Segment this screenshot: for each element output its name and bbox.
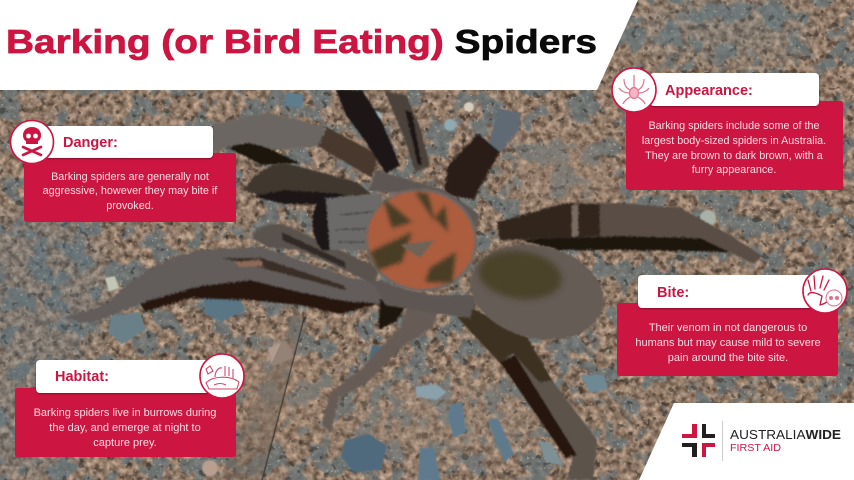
text: bite: [635, 322, 821, 364]
heading: danger: Danger:: [63, 135, 118, 151]
panel: appearance: [612, 68, 843, 190]
title banner: [0, 0, 638, 90]
logo panel: [639, 403, 854, 480]
icon: hand with bite: [803, 269, 847, 313]
carapace: [358, 181, 484, 299]
pedipalp: [312, 193, 382, 250]
leg: upper left: [213, 112, 378, 178]
logo wordmark: [730, 428, 841, 454]
text: appearance: Barking spiders include some of the: [648, 120, 820, 132]
text: habitat: [34, 407, 216, 449]
text: danger: Barking spiders are generally not: [51, 171, 209, 183]
panel: bite: [617, 269, 847, 376]
text: danger: provoked.: [106, 200, 154, 212]
legs: top: [336, 90, 521, 199]
text: appearance: They are brown to dark brown, with a: [645, 150, 823, 162]
leg: right: [497, 203, 762, 264]
text: appearance: largest body-sized spiders in Australia.: [642, 135, 826, 147]
icon: first aid cross logo: [682, 424, 715, 457]
panel: danger: [10, 120, 236, 222]
text: danger: [43, 171, 218, 212]
icon: spider: [612, 68, 656, 112]
text: danger: aggressive, however they may bite if: [43, 185, 218, 197]
title: Barking (or Bird Eating) Spiders: [6, 24, 597, 61]
panel: habitat: [15, 354, 244, 457]
text: bite: pain around the bite site.: [668, 352, 788, 364]
leg: second left: [252, 224, 378, 285]
text: appearance: [642, 120, 826, 176]
text: habitat: the day, and emerge at night to: [49, 422, 201, 434]
heading: appearance: Appearance:: [665, 83, 753, 99]
leg: far left lower: [67, 247, 398, 323]
text: bite: humans but may cause mild to severe: [635, 337, 821, 349]
text: bite: Their venom in not dangerous to: [649, 322, 807, 334]
leg base fur joints: [370, 170, 480, 318]
icon: burrow landscape: [200, 354, 244, 398]
heading: habitat: Habitat:: [55, 369, 109, 385]
text: habitat: capture prey.: [93, 437, 157, 449]
logo wordmark: FIRST AID: [730, 442, 781, 454]
text: habitat: Barking spiders live in burrows during: [34, 407, 216, 419]
leg: second upper left: [243, 163, 372, 204]
abdomen: [460, 231, 614, 353]
icon: skull and crossbones: [10, 120, 54, 164]
text: appearance: furry appearance.: [692, 164, 776, 176]
legs: bottom: [322, 293, 597, 480]
heading: bite: Bite:: [657, 285, 689, 301]
spider photo: [67, 90, 762, 480]
logo wordmark: AUSTRALIA WIDE: [730, 428, 841, 442]
